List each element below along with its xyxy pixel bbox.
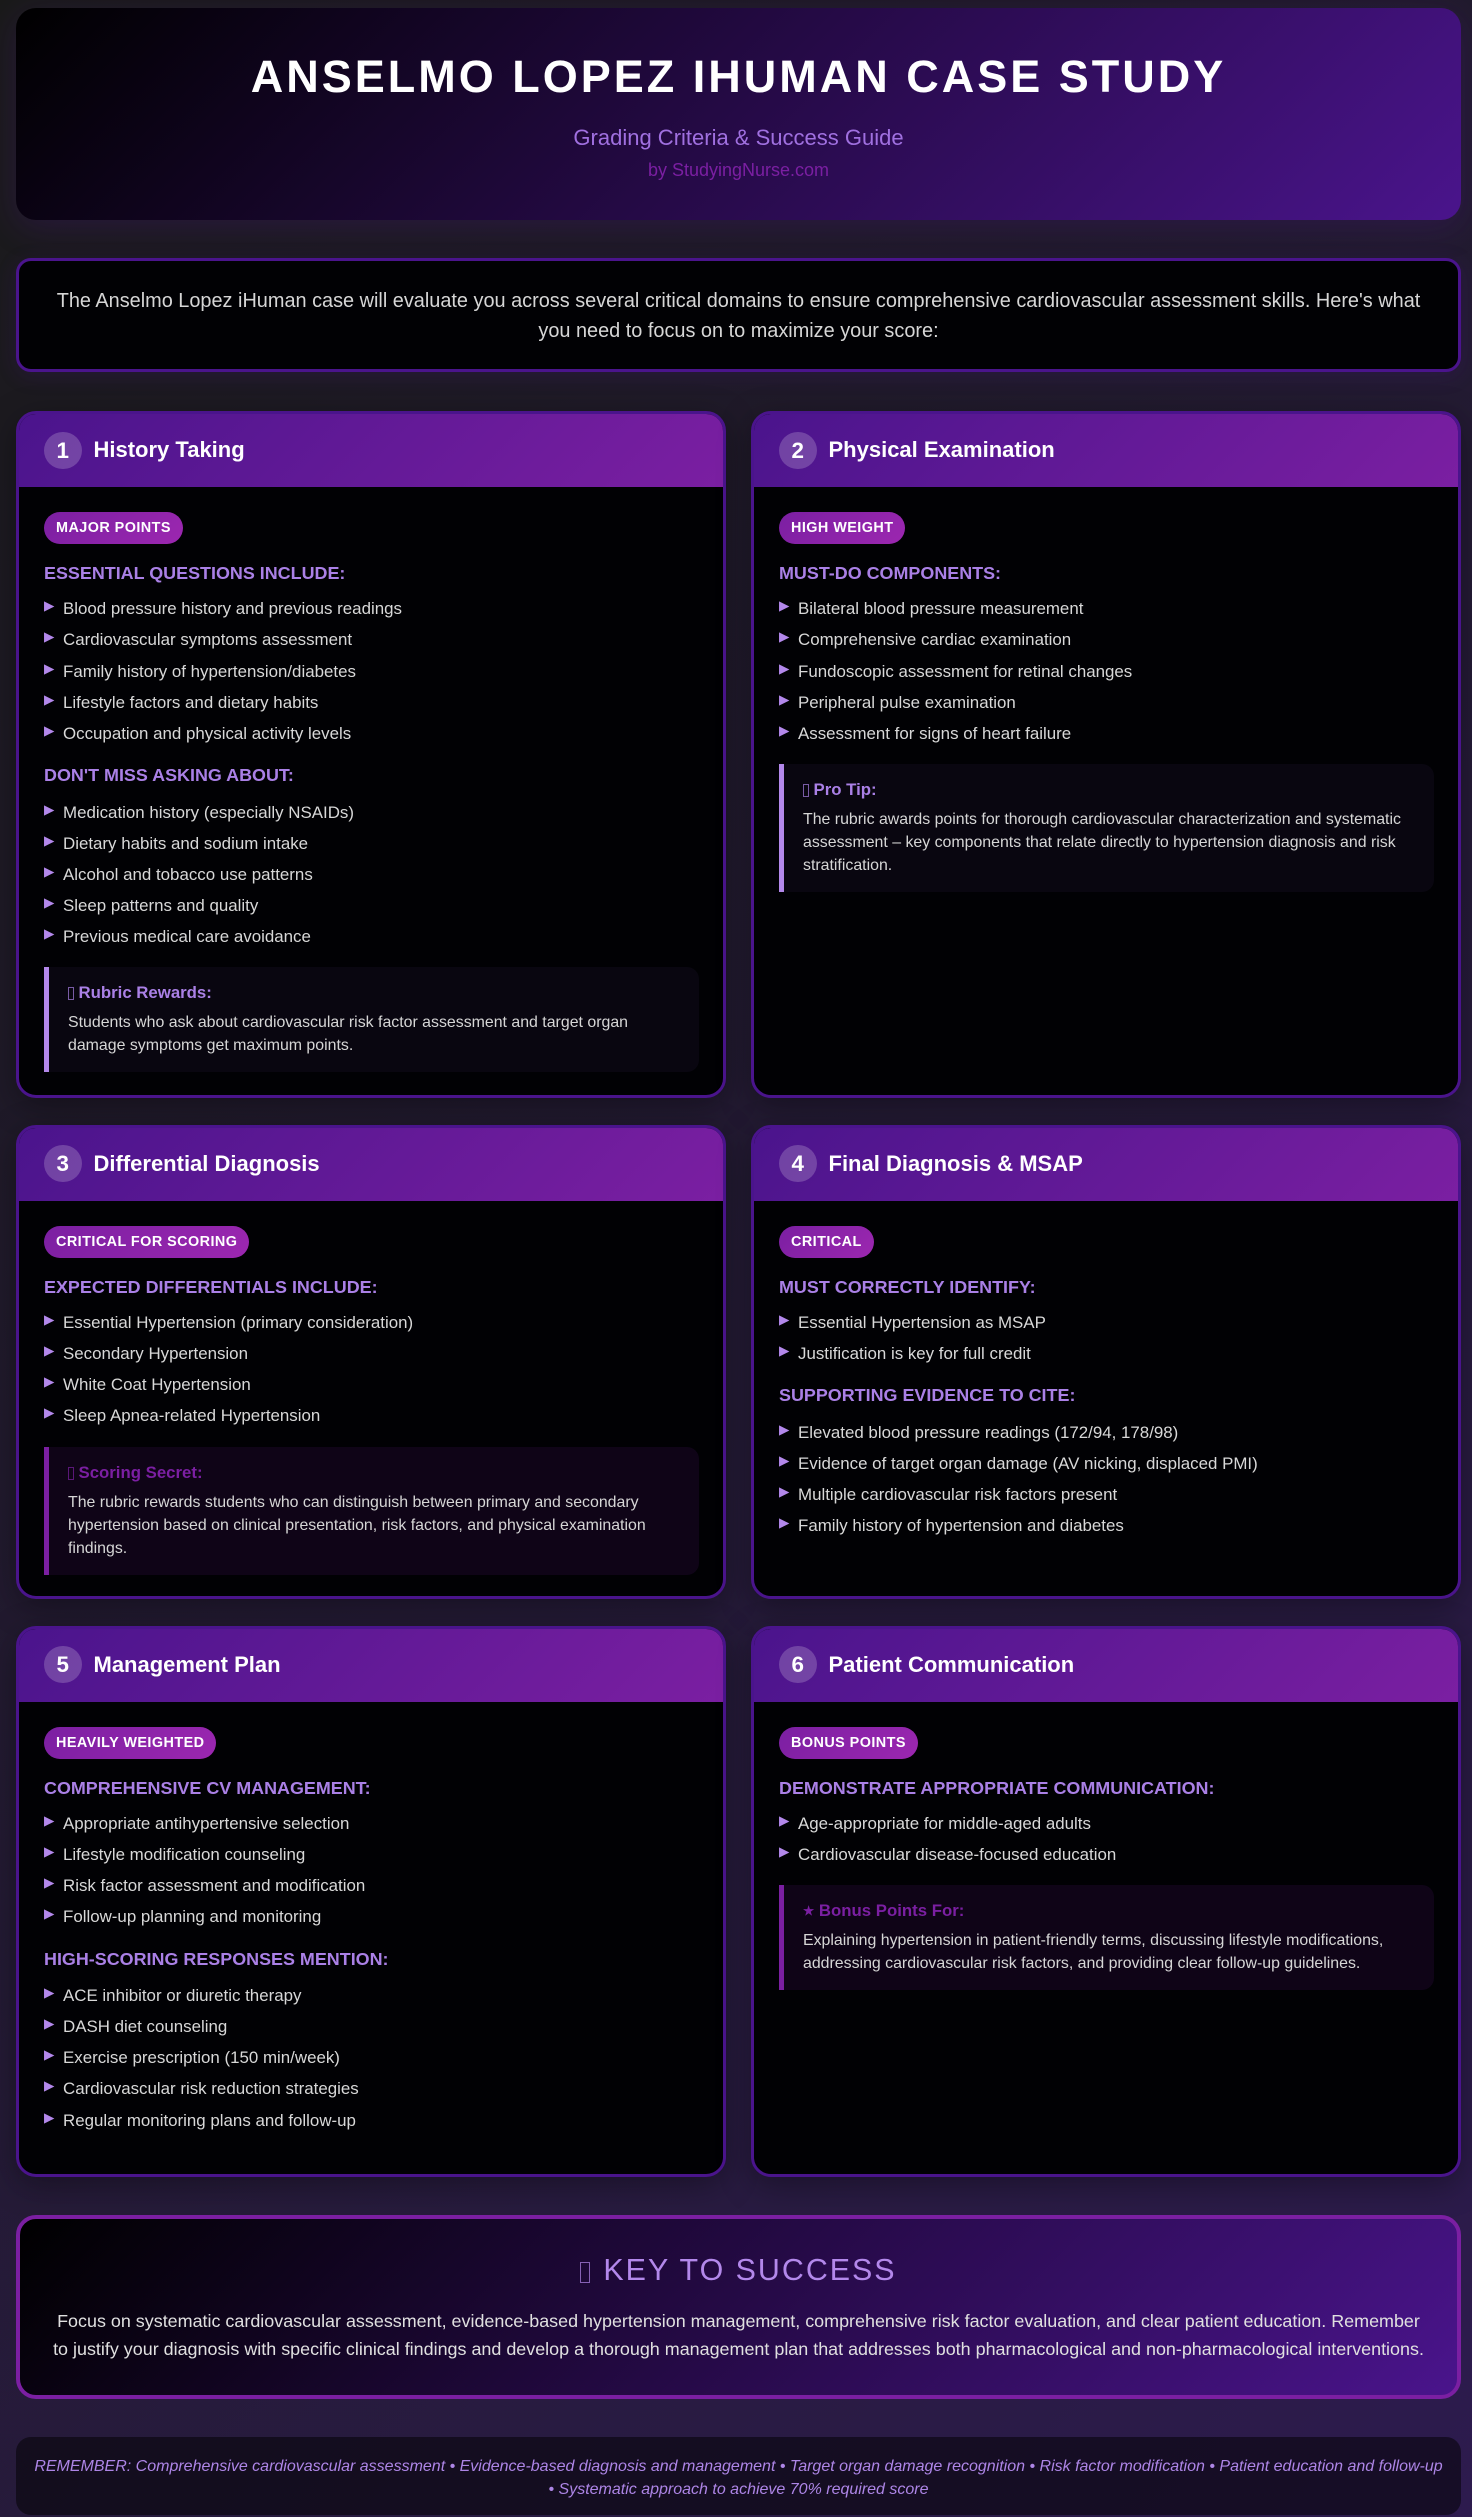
list: supporting evidence: Multiple cardiovascular risk factors present	[798, 1485, 1117, 1504]
heading: appropriate communication: DEMONSTRATE APPROPRIATE COMMUNICATION:	[779, 1778, 1214, 1798]
heading: high-scoring responses: HIGH-SCORING RESPONSES MENTION:	[44, 1949, 389, 1969]
badge: bonus points	[779, 1727, 918, 1759]
header banner	[16, 8, 1461, 220]
badge: major points: MAJOR POINTS	[56, 520, 171, 536]
list: must-do components: Comprehensive cardiac examination	[798, 630, 1071, 649]
list: supporting evidence: Evidence of target organ damage (AV nicking, displaced PMI)	[798, 1454, 1258, 1473]
list: must-do components: Assessment for signs of heart failure	[798, 724, 1071, 743]
panel header: patient communication	[751, 1626, 1461, 1702]
badge: critical	[779, 1226, 874, 1258]
panel header: final diagnosis: 4	[792, 1151, 804, 1176]
list: must-do components: Peripheral pulse examination	[798, 693, 1016, 712]
panel: history taking	[16, 411, 726, 1098]
list: high-scoring responses: Cardiovascular risk reduction strategies	[63, 2079, 359, 2098]
list: essential questions: Cardiovascular symptoms assessment	[63, 630, 352, 649]
heading: comprehensive CV management: COMPREHENSIVE CV MANAGEMENT:	[44, 1778, 371, 1798]
callout: bonus points: ★ Bonus Points For:	[803, 1901, 964, 1920]
heading: must correctly identify: MUST CORRECTLY IDENTIFY:	[779, 1276, 1036, 1296]
title: ANSELMO LOPEZ IHUMAN CASE STUDY	[251, 51, 1226, 102]
list: essential questions: Family history of hypertension/diabetes	[63, 662, 356, 681]
badge: high weight	[779, 512, 905, 544]
panel: patient communication	[751, 1626, 1461, 2177]
list: essential questions: Occupation and physical activity levels	[63, 724, 351, 743]
panel: management plan	[16, 1626, 726, 2177]
panel header: patient communication: 6	[792, 1652, 804, 1677]
callout: bonus points	[779, 1885, 1434, 1990]
heading: key to success: KEY TO SUCCESS	[603, 2253, 897, 2287]
panel header: differential diagnosis	[16, 1124, 726, 1200]
panel header: final diagnosis	[751, 1124, 1461, 1200]
list: essential questions: Blood pressure history and previous readings	[63, 599, 402, 618]
list: expected differentials: Sleep Apnea-related Hypertension	[63, 1406, 320, 1425]
callout: pro tip: Pro Tip:	[814, 780, 877, 799]
key to success panel	[16, 2215, 1461, 2399]
heading: expected differentials: EXPECTED DIFFERENTIALS INCLUDE:	[44, 1276, 378, 1296]
list: supporting evidence: Elevated blood pressure readings (172/94, 178/98)	[798, 1423, 1178, 1442]
badge: major points	[44, 512, 183, 544]
callout: bonus points: Explaining hypertension in patient-friendly terms, discussing lifestyle modifications, addressing cardiovascular risk factors, and providing clear follow-up guidelines.	[803, 1932, 1383, 1972]
list: CV management: Follow-up planning and monitoring	[63, 1907, 321, 1926]
list: must correctly identify	[779, 1313, 1046, 1363]
list: don't miss: Alcohol and tobacco use patterns	[63, 865, 313, 884]
heading: don't miss: DON'T MISS ASKING ABOUT:	[44, 765, 294, 785]
list: don't miss: Medication history (especially NSAIDs)	[63, 803, 354, 822]
badge: critical for scoring	[44, 1226, 249, 1258]
badge: bonus points: BONUS POINTS	[791, 1735, 906, 1751]
panel header: differential diagnosis: 3	[57, 1151, 69, 1176]
list: don't miss: Sleep patterns and quality	[63, 896, 258, 915]
panel header: differential diagnosis: Differential Diagnosis	[94, 1150, 320, 1176]
list: CV management	[44, 1814, 365, 1926]
byline: by StudyingNurse.com	[648, 160, 829, 180]
list: appropriate communication: Age-appropriate for middle-aged adults	[798, 1814, 1091, 1833]
list: must correctly identify: Justification is key for full credit	[798, 1344, 1031, 1363]
panel header: final diagnosis: Final Diagnosis & MSAP	[828, 1150, 1083, 1176]
badge: critical: CRITICAL	[791, 1234, 862, 1250]
panel header: patient communication: Patient Communication	[828, 1652, 1074, 1677]
panel header: physical examination: Physical Examination	[828, 437, 1055, 462]
callout: pro tip	[779, 764, 1434, 892]
callout: scoring secret	[44, 1447, 699, 1575]
panel: final diagnosis and MSAP	[751, 1124, 1461, 1599]
callout: rubric rewards	[44, 967, 699, 1072]
list: expected differentials	[44, 1313, 413, 1425]
intro text panel	[16, 258, 1461, 372]
list: high-scoring responses: Regular monitoring plans and follow-up	[63, 2111, 356, 2130]
text: key to success: Focus on systematic cardiovascular assessment, evidence-based hypertension management, comprehensive risk factor evaluation, and clear patient education. Remember to justify your diagnosis with specific clinical findings and develop a thorough management plan that addresses both pharmacological and non-pharmacological interventions.	[53, 2311, 1424, 2359]
badge: heavily weighted	[44, 1727, 216, 1759]
list: appropriate communication	[779, 1814, 1116, 1864]
panel header: physical examination	[751, 411, 1461, 487]
list: high-scoring responses: DASH diet counseling	[63, 2017, 227, 2036]
footer reminder	[16, 2437, 1461, 2515]
list: supporting evidence	[779, 1423, 1258, 1535]
list: CV management: Risk factor assessment and modification	[63, 1876, 365, 1895]
list: expected differentials: White Coat Hypertension	[63, 1375, 251, 1394]
list: must-do components	[779, 599, 1132, 743]
heading: supporting evidence: SUPPORTING EVIDENCE TO CITE:	[779, 1385, 1075, 1405]
callout: pro tip: The rubric awards points for thorough cardiovascular characterization and systematic assessment – key components that relate directly to hypertension diagnosis and risk stratification.	[803, 811, 1401, 874]
panel header: management plan: 5	[57, 1652, 69, 1677]
list: must-do components: Fundoscopic assessment for retinal changes	[798, 662, 1132, 681]
list: don't miss	[44, 803, 354, 946]
heading: must-do components: MUST-DO COMPONENTS:	[779, 563, 1001, 583]
list: essential questions	[44, 599, 402, 743]
list: must-do components: Bilateral blood pressure measurement	[798, 599, 1083, 618]
heading: essential questions: ESSENTIAL QUESTIONS INCLUDE:	[44, 563, 345, 583]
list: essential questions: Lifestyle factors and dietary habits	[63, 693, 318, 712]
list: high-scoring responses	[44, 1986, 359, 2130]
badge: critical for scoring: CRITICAL FOR SCORING	[56, 1234, 237, 1250]
list: expected differentials: Secondary Hypertension	[63, 1344, 248, 1363]
list: high-scoring responses: ACE inhibitor or diuretic therapy	[63, 1986, 301, 2005]
list: must correctly identify: Essential Hypertension as MSAP	[798, 1313, 1046, 1332]
intro text panel: The Anselmo Lopez iHuman case will evaluate you across several critical domains to ensure comprehensive cardiovascular assessment skills. Here's what you need to focus on to maximize your score:	[57, 290, 1420, 342]
list: don't miss: Previous medical care avoidance	[63, 927, 311, 946]
panel header: physical examination: 2	[792, 438, 804, 462]
callout: rubric rewards: Students who ask about cardiovascular risk factor assessment and target organ damage symptoms get maximum points.	[68, 1014, 628, 1054]
callout: scoring secret: Scoring Secret:	[78, 1463, 203, 1482]
panel header: history taking: 1	[57, 438, 69, 462]
badge: high weight: HIGH WEIGHT	[791, 520, 893, 536]
list: don't miss: Dietary habits and sodium intake	[63, 834, 308, 853]
callout: scoring secret: The rubric rewards students who can distinguish between primary and secondary hypertension based on clinical presentation, risk factors, and physical examination findings.	[68, 1494, 646, 1557]
panel header: management plan	[16, 1626, 726, 1702]
footer reminder: REMEMBER: Comprehensive cardiovascular assessment • Evidence-based diagnosis and management • Target organ damage recognition • Risk factor modification • Patient education and follow-up • Systematic approach to achieve 70% required score	[34, 2458, 1443, 2498]
panel header: history taking: History Taking	[94, 437, 245, 462]
list: supporting evidence: Family history of hypertension and diabetes	[798, 1516, 1124, 1535]
callout: rubric rewards: Rubric Rewards:	[78, 983, 212, 1002]
panel header: history taking	[16, 411, 726, 487]
list: CV management: Lifestyle modification counseling	[63, 1845, 305, 1864]
list: expected differentials: Essential Hypertension (primary consideration)	[63, 1313, 413, 1332]
badge: heavily weighted: HEAVILY WEIGHTED	[56, 1735, 204, 1751]
list: appropriate communication: Cardiovascular disease-focused education	[798, 1845, 1116, 1864]
list: high-scoring responses: Exercise prescription (150 min/week)	[63, 2048, 340, 2067]
subtitle: Grading Criteria & Success Guide	[573, 125, 904, 150]
panel: physical examination	[751, 411, 1461, 1098]
list: CV management: Appropriate antihypertensive selection	[63, 1814, 349, 1833]
panel: differential diagnosis	[16, 1124, 726, 1599]
panel header: management plan: Management Plan	[94, 1652, 281, 1677]
